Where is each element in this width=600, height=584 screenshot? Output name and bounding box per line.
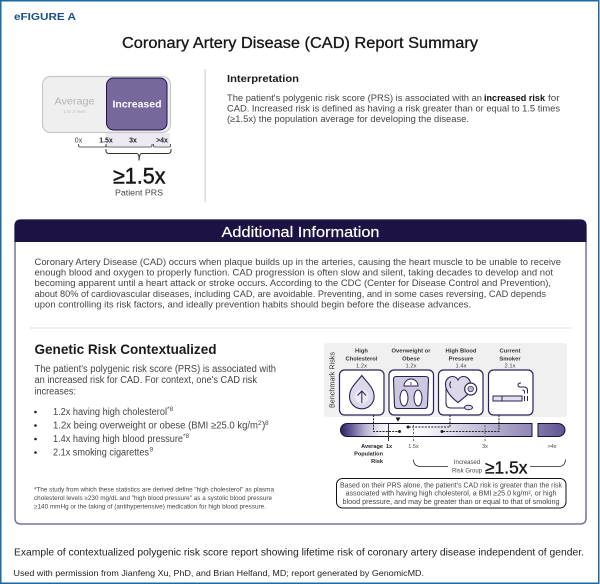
bar tick labels: 1.5x [408,444,419,450]
scale tick labels: 3x [129,138,137,144]
CAD overview paragraph: upon controlling its risk factors, and ideally prevention habits should begin before the disease advances. [34,300,471,310]
risk bullet list: *8 [167,406,174,413]
average population risk label: Population [354,452,384,458]
increased risk group bracket: ≥1.5x [485,458,528,478]
risk bullet list: 1.4x having high blood pressure [53,434,183,445]
patient PRS value: ≥1.5x [113,164,166,188]
CAD overview paragraph: Coronary Artery Disease (CAD) occurs when plaque builds up in the arteries, causing the heart muscle to be unable to receive [34,257,561,268]
footnote: ≥140 mmHg or the taking of (antihypertensive) medication for high blood pressure. [34,504,266,510]
panel: additional information [14,220,586,524]
CAD overview paragraph: about 80% of cardiovascular diseases, including CAD, are avoidable. Preventing, and in some cases reversing, CAD depends [34,289,546,300]
interpretation body [227,93,561,124]
benchmark labels: Cholesterol [346,356,378,362]
title: Coronary Artery Disease (CAD) Report Summary [122,35,478,52]
benchmark labels: 1.4x [456,364,467,370]
panel header bar [14,220,586,242]
genetic risk intro text [34,364,276,398]
interpretation heading: Interpretation [227,73,299,85]
interpretation body: CAD. Increased risk is defined as having a risk greater than or equal to 1.5 times [227,104,561,114]
average risk box: 1 in 2 men [63,109,86,115]
icon: cigarette [488,370,533,415]
benchmark labels [346,348,521,370]
interpretation body: (≥1.5x) the population average for developing the disease. [227,114,469,124]
interpretation body: increased risk [484,93,546,103]
footnote: *The study from which these statistics are derived define "high cholesterol" as plasma [34,488,275,494]
icon: blood drop [340,370,384,415]
increased risk group bracket: Risk Group [452,468,483,474]
benchmark labels: High Blood [446,348,477,354]
scale tick labels [75,138,168,144]
bar tick labels: 3x [482,444,488,450]
interpretation body: for [548,93,560,103]
footnote [34,488,275,510]
risk bullet list: 1.2x having high cholesterol [53,407,167,418]
genetic risk intro text: increases: [34,386,76,398]
patient PRS label: Patient PRS [115,188,163,198]
genetic risk intro text: an increased risk for CAD. For context, one's CAD risk [34,375,258,386]
risk bullet list: 1.2x being overweight or obese (BMI ≥25.0 kg/m [53,420,258,432]
bar tick labels [386,444,557,450]
average risk box [42,76,170,132]
footnote: cholesterol levels ≥230 mg/dL and "high blood pressure" as a systolic blood pressure [34,496,273,502]
average population risk label [354,444,384,465]
caption: Example of contextualized polygenic risk score report showing lifetime risk of coronary artery disease independent of gender. [14,546,584,558]
benchmark labels: Pressure [449,356,474,362]
scale tick labels: >4x [156,138,168,144]
benchmark axis label: Benchmark Risks [328,352,336,408]
increased risk group bracket [414,458,566,478]
risk bullet list: 2.1x smoking cigarettes [53,448,149,458]
bar tick labels: >4x [547,444,557,450]
interpretation body: The patient's polygenic risk score (PRS) is associated with an [227,93,482,103]
benchmark connector arrows [374,415,499,441]
risk bullet list: 9 [150,446,154,454]
benchmark labels: Current [500,348,521,354]
scale tick labels: 0x [75,138,83,144]
benchmark labels: 2.1x [505,364,516,370]
average risk box: Average [54,96,95,108]
increased risk group bracket: Increased [454,460,480,466]
risk category graphic [42,76,171,198]
CAD overview paragraph: becoming apparent until a heart attack or stroke occurs. According to the CDC (Center for Disease Control and Prevention), [34,278,551,289]
CAD overview paragraph: enough blood and oxygen to properly function. CAD progression is often slow and silent, taking decades to develop and not [34,268,553,278]
benchmark labels: Smoker [499,356,521,362]
average population risk label: Average [361,444,383,450]
benchmark risks chart [324,343,567,508]
scale tick labels: 1.5x [99,138,113,144]
interpretation text block [227,73,561,124]
risk bullet list: ) [262,420,265,432]
figure label: eFIGURE A [14,11,76,23]
risk gradient bar [340,424,565,436]
icon: scale [389,370,434,415]
average population risk label: Risk [371,459,384,465]
risk bullet list: 8 [265,420,269,427]
permission credit: Used with permission from Jianfeng Xu, PhD, and Brian Helfand, MD; report generated by GenomicMD. [14,568,424,578]
genetic risk heading: Genetic Risk Contextualized [34,341,216,357]
benchmark labels: 1.2x [356,364,367,370]
callout [336,478,566,508]
benchmark panel background [324,343,567,417]
panel header bar: Additional Information [222,224,380,241]
benchmark labels: High [355,348,368,354]
risk bullet list: *8 [183,433,190,440]
benchmark labels: Obese [402,356,421,362]
CAD overview paragraph [34,257,561,310]
callout: Based on their PRS alone, the patient's CAD risk is greater than the risk [340,482,562,490]
callout: blood pressure, and may be greater than or equal to that of smoking [342,499,560,506]
genetic risk intro text: The patient's polygenic risk score (PRS) is associated with [34,364,276,375]
benchmark labels: 1.2x [406,364,417,370]
icon: heart with blood pressure gauge [438,370,483,415]
risk bullet list [34,406,269,458]
benchmark labels: Overweight or [392,348,431,354]
bar tick labels: 1x [386,444,393,450]
risk bullet list: 2 [258,420,262,427]
callout: associated with having high cholesterol, a BMI ≥25.0 kg/m², or high [346,490,557,498]
increased risk box: Increased [112,100,162,110]
scale brackets [78,144,171,160]
